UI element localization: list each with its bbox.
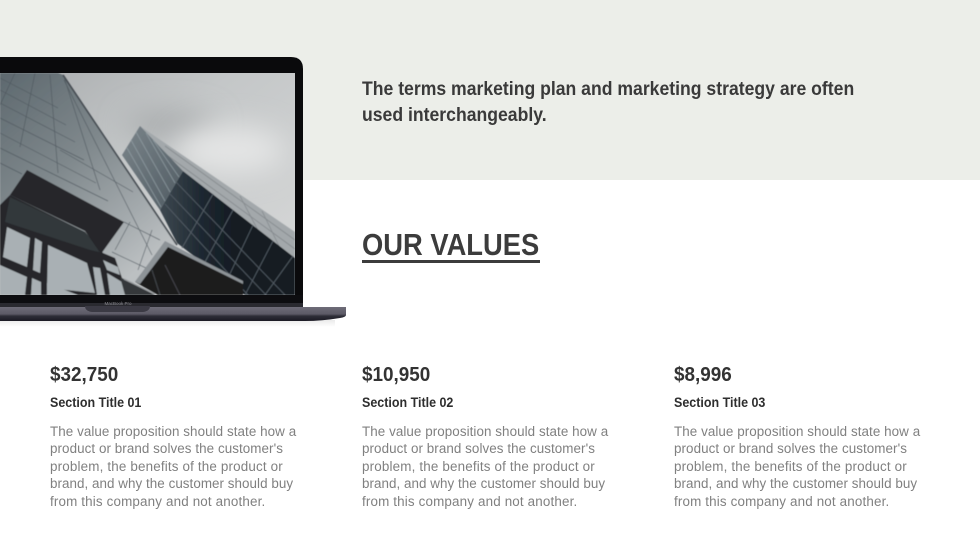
heading: our values: OUR VALUES (362, 227, 539, 262)
right building (140, 126, 295, 258)
lower canopy (135, 242, 243, 295)
lead statement: used interchangeably. (362, 104, 547, 126)
heading underline (362, 260, 540, 263)
laptop with building photo (0, 57, 346, 324)
left building (0, 73, 177, 295)
lead statement (362, 78, 854, 126)
section title 3: Section Title 03 (674, 395, 765, 410)
section title 1: Section Title 01 (50, 395, 141, 410)
laptop chin (0, 295, 303, 303)
section title 2: Section Title 02 (362, 395, 453, 410)
trackpad notch (85, 306, 150, 312)
body text 2: The value proposition should state how a (362, 424, 608, 439)
body text 3: product or brand solves the customer's (674, 441, 907, 456)
laptop shadow (0, 320, 335, 327)
body text 2: product or brand solves the customer's (362, 441, 595, 456)
laptop model label: MacBook Pro (104, 301, 132, 306)
body text 1: from this company and not another. (50, 494, 265, 509)
body text 1: product or brand solves the customer's (50, 441, 283, 456)
value 3: $8,996 (674, 364, 732, 386)
dark canopy (10, 170, 124, 254)
top grey band (0, 0, 980, 180)
body text 1: problem, the benefits of the product or (50, 459, 283, 474)
body text 3: brand, and why the customer should buy (674, 476, 917, 491)
laptop base (0, 307, 346, 321)
column 1 (50, 364, 296, 509)
photo (0, 73, 295, 295)
value 2: $10,950 (362, 364, 430, 386)
windows under canopy (0, 195, 128, 295)
lower ledge (120, 277, 155, 295)
body text 1 (50, 424, 296, 509)
body text 2: from this company and not another. (362, 494, 577, 509)
column 2 (362, 364, 608, 509)
laptop lid (0, 57, 303, 307)
body text 1: The value proposition should state how a (50, 424, 296, 439)
body text 3: The value proposition should state how a (674, 424, 920, 439)
body text 3: problem, the benefits of the product or (674, 459, 907, 474)
value 1: $32,750 (50, 364, 118, 386)
column 3 (674, 364, 920, 509)
body text 2: problem, the benefits of the product or (362, 459, 595, 474)
body text 2: brand, and why the customer should buy (362, 476, 605, 491)
body text 1: brand, and why the customer should buy (50, 476, 293, 491)
lead statement: The terms marketing plan and marketing strategy are often (362, 78, 854, 100)
body text 3 (674, 424, 920, 509)
body text 2 (362, 424, 608, 509)
body text 3: from this company and not another. (674, 494, 889, 509)
